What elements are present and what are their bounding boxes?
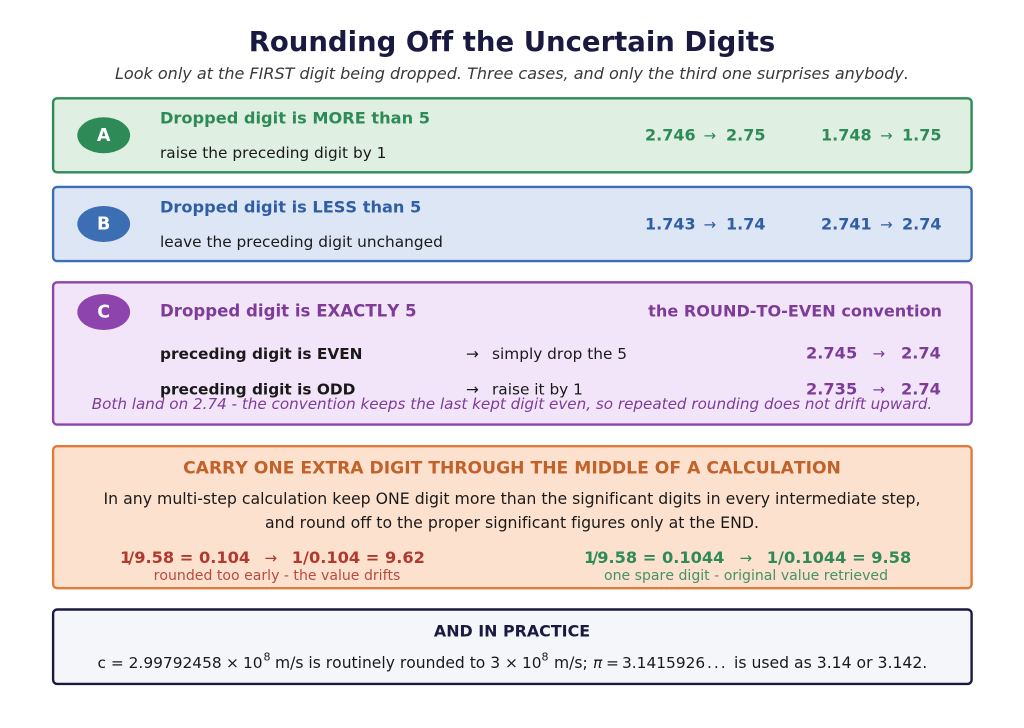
- example: rounded too early: [120, 548, 425, 584]
- text block: practice: 8: [264, 650, 270, 664]
- example: 1.743: 1.743: [645, 214, 696, 234]
- row: odd: →: [466, 380, 479, 398]
- text block: practice: π: [593, 654, 603, 672]
- note: case C: Both land on 2.74 - the convention keeps the last kept digit even, so repeated rounding does not drift upward.: [92, 395, 932, 413]
- text block: practice: c = 2.99792458: [98, 654, 222, 672]
- row: even: 2.745: [806, 344, 857, 362]
- text block: practice: 8: [542, 650, 548, 664]
- example: 1.748: 1.748: [821, 126, 872, 144]
- row: even: →: [872, 344, 885, 362]
- text block: practice: m/s;: [554, 654, 588, 672]
- example: 1.748: →: [880, 126, 893, 144]
- text block: practice: 10: [522, 654, 542, 672]
- example: 1.743: →: [704, 216, 716, 234]
- text block: practice: 3.1415926: [622, 654, 705, 672]
- row: odd: →: [872, 380, 885, 398]
- example: one spare digit: 1/9.58 = 0.1044: [584, 548, 724, 567]
- row: odd: [160, 380, 941, 398]
- heading: round-to-even: the ROUND-TO-EVEN convention: [648, 302, 942, 320]
- title: Rounding Off the Uncertain Digits: [249, 26, 775, 58]
- example: 2.741: 2.74: [902, 214, 941, 234]
- icon: badge B: B: [97, 214, 110, 234]
- example: one spare digit: one spare digit - original value retrieved: [604, 568, 888, 584]
- example: 1.748: 1.75: [902, 126, 941, 144]
- row: odd: 2.74: [901, 380, 941, 398]
- text block: carry explanation: [104, 489, 920, 532]
- example: 1.743: 1.74: [726, 214, 765, 234]
- example: rounded too early: 1/9.58 = 0.104: [120, 548, 250, 567]
- text block: practice: [98, 650, 927, 672]
- example: rounded too early: →: [264, 549, 277, 567]
- row: odd: preceding digit is ODD: [160, 380, 355, 398]
- example: 2.741: 2.741: [821, 214, 872, 234]
- example: 2.746: [645, 126, 765, 144]
- panel: and in practice: [53, 610, 972, 684]
- example: 2.741: →: [880, 216, 893, 234]
- example: rounded too early: rounded too early - the value drifts: [154, 568, 400, 584]
- row: even: →: [466, 345, 479, 363]
- text block: practice: is used as 3.14 or 3.142.: [734, 653, 927, 672]
- example: 1.748: [821, 126, 941, 144]
- heading: case C: Dropped digit is EXACTLY 5: [160, 302, 417, 320]
- row: odd: raise it by 1: [492, 380, 583, 398]
- icon: badge C: [77, 294, 130, 330]
- heading: practice: AND IN PRACTICE: [434, 622, 590, 640]
- example: one spare digit: [584, 548, 911, 584]
- row: odd: 2.735: [806, 380, 857, 398]
- heading: carry: CARRY ONE EXTRA DIGIT THROUGH THE MIDDLE OF A CALCULATION: [183, 458, 841, 478]
- icon: badge A: [77, 117, 130, 153]
- rule: case A: raise the preceding digit by 1: [160, 144, 386, 162]
- row: even: preceding digit is EVEN: [160, 345, 363, 363]
- subtitle: Look only at the FIRST digit being dropped. Three cases, and only the third one surprises anybody.: [115, 64, 909, 83]
- example: one spare digit: 1/0.1044 = 9.58: [767, 548, 911, 567]
- panel: case A: [53, 98, 972, 172]
- text block: carry explanation: and round off to the proper significant figures only at the END.: [265, 513, 759, 532]
- text block: practice: =: [606, 654, 619, 672]
- icon: badge A: A: [97, 126, 111, 146]
- icon: badge C: C: [97, 302, 110, 322]
- heading: case B: Dropped digit is LESS than 5: [160, 198, 421, 216]
- row: even: [160, 344, 941, 363]
- text block: practice: m/s is routinely rounded to 3: [275, 654, 500, 672]
- example: 2.746: 2.746: [645, 126, 696, 144]
- panel: case C: [53, 282, 972, 425]
- example: 1.743: [645, 214, 765, 234]
- row: even: simply drop the 5: [492, 345, 627, 363]
- text block: practice: 10: [243, 654, 263, 672]
- text block: practice: ×: [505, 654, 518, 672]
- text block: practice: ...: [707, 654, 728, 672]
- heading: case A: Dropped digit is MORE than 5: [160, 108, 430, 128]
- panel: carry one extra digit: [53, 446, 972, 588]
- rule: case B: leave the preceding digit unchanged: [160, 233, 443, 251]
- example: rounded too early: 1/0.104 = 9.62: [292, 548, 425, 567]
- example: 2.746: →: [704, 126, 716, 144]
- row: even: 2.74: [901, 344, 941, 362]
- text block: practice: ×: [226, 654, 239, 672]
- panel: case B: [53, 187, 972, 261]
- example: 2.746: 2.75: [726, 126, 765, 144]
- text block: carry explanation: In any multi-step calculation keep ONE digit more than the significant digits in every intermediate step,: [104, 489, 920, 508]
- example: one spare digit: →: [740, 549, 752, 567]
- example: 2.741: [821, 214, 941, 234]
- icon: badge B: [77, 206, 130, 242]
